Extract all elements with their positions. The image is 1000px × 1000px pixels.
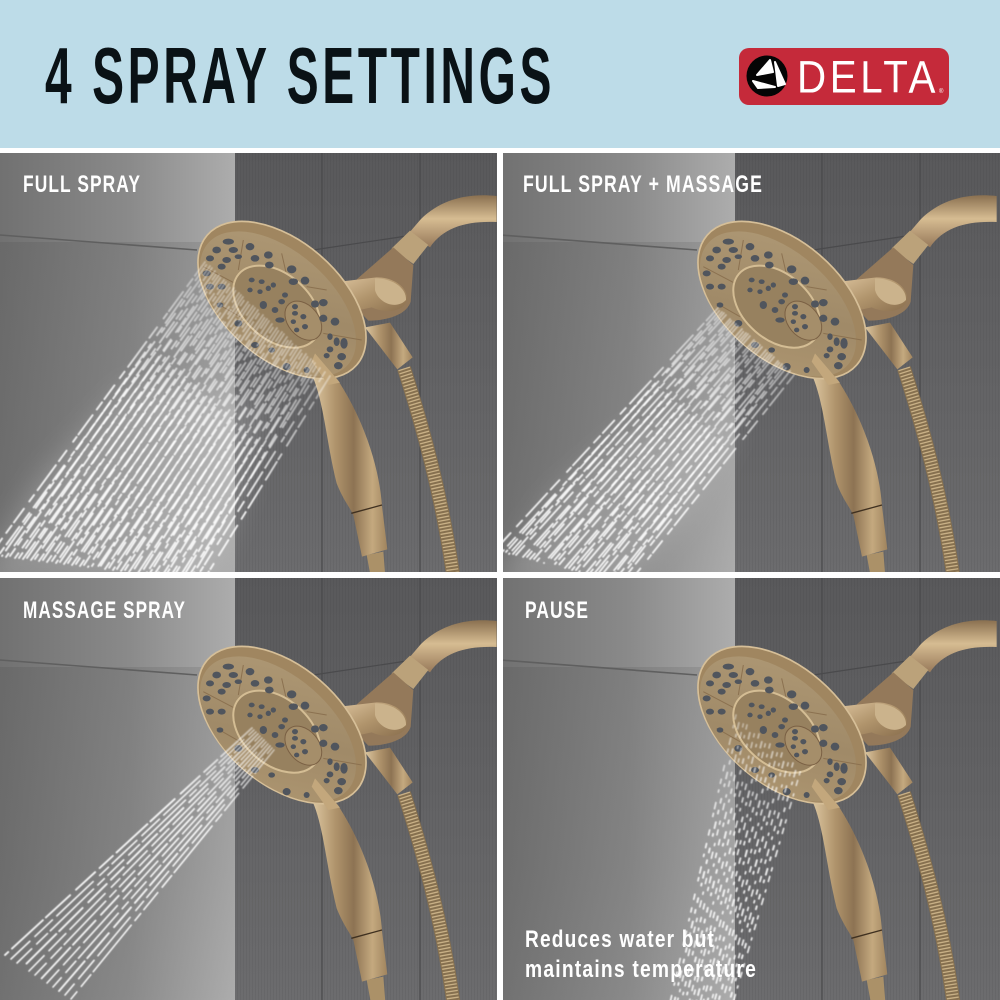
panel background: shower wall <box>0 153 500 578</box>
header band <box>0 0 1000 148</box>
logo: Delta: DELTA <box>797 52 939 102</box>
panel background: shower wall <box>0 578 500 1000</box>
logo: Delta <box>739 48 949 105</box>
title: 4 SPRAY SETTINGS <box>45 31 555 120</box>
panel: massage spray <box>0 578 500 1000</box>
shower head <box>169 616 497 1000</box>
shower head <box>669 616 997 1000</box>
label: full spray: FULL SPRAY <box>23 171 141 198</box>
note: reduces water: Reduces water but <box>525 926 715 953</box>
shower head <box>197 195 497 572</box>
label: full spray + massage: FULL SPRAY + MASSAGE <box>523 171 763 198</box>
water spray <box>5 728 274 999</box>
shower head <box>697 195 997 572</box>
panel: pause <box>500 578 1000 1000</box>
note: maintains temperature: maintains temperature <box>525 956 757 983</box>
label: pause: PAUSE <box>525 597 589 624</box>
panel background: shower wall <box>500 578 1000 1000</box>
panel background: shower wall <box>500 153 1000 578</box>
panel: full spray + massage <box>490 153 1000 590</box>
water trickle <box>670 715 801 1000</box>
logo: Delta: ® <box>939 88 944 95</box>
label: massage spray: MASSAGE SPRAY <box>23 597 186 624</box>
water spray <box>490 308 794 590</box>
water spray <box>0 262 330 590</box>
panel: full spray <box>0 153 500 590</box>
